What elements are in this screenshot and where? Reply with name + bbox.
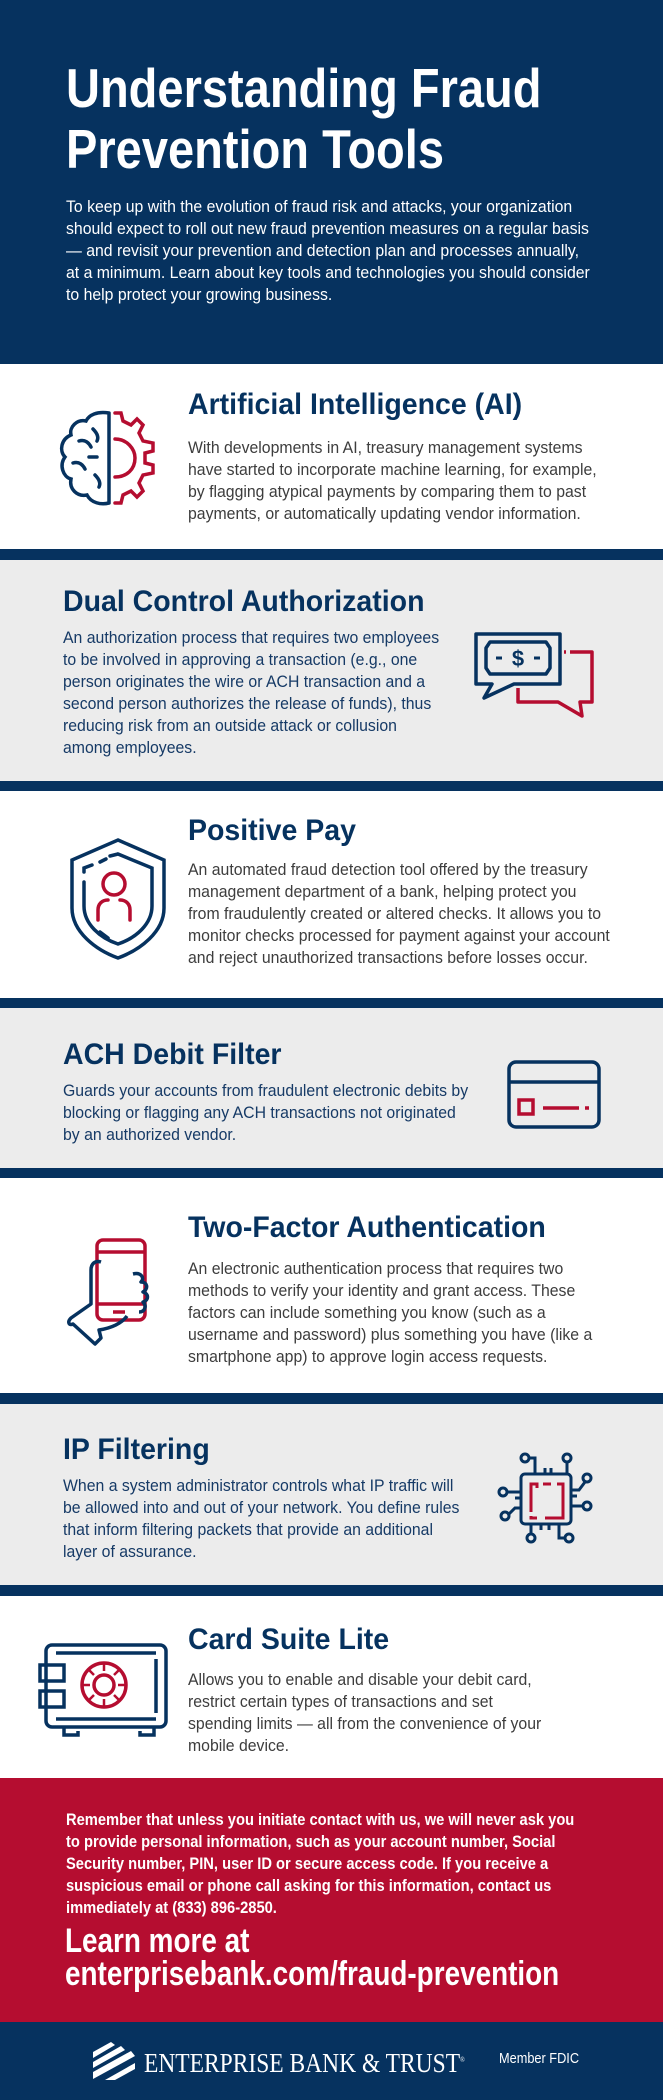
body: IP filtering: layer of assurance.: [63, 1542, 197, 1561]
body: card suite lite: spending limits — all from the convenience of your: [188, 1714, 541, 1733]
body: AI: by flagging atypical payments by comparing them to past: [188, 482, 586, 501]
body: two-factor: An electronic authentication process that requires two: [188, 1259, 563, 1278]
body: two-factor: [188, 1259, 592, 1366]
intro text: [66, 197, 590, 304]
body: ACH: blocking or flagging any ACH transactions not originated: [63, 1103, 456, 1122]
intro text: to help protect your growing business.: [66, 285, 332, 304]
body: two-factor: methods to verify your identity and grant access. These: [188, 1281, 575, 1300]
body: dual control: among employees.: [63, 738, 197, 757]
body: two-factor: smartphone app) to approve login access requests.: [188, 1347, 547, 1366]
intro text: should expect to roll out new fraud prevention measures on a regular basis: [66, 219, 589, 238]
body: ACH: by an authorized vendor.: [63, 1125, 236, 1144]
title: Prevention Tools: [66, 118, 444, 180]
body: dual control: to be involved in approving a transaction (e.g., one: [63, 650, 417, 669]
body: IP filtering: [63, 1476, 459, 1561]
intro text: To keep up with the evolution of fraud risk and attacks, your organization: [66, 197, 572, 216]
member FDIC: Member FDIC: [499, 2050, 579, 2067]
body: ACH: Guards your accounts from fraudulent electronic debits by: [63, 1081, 468, 1100]
body: positive pay: and reject unauthorized transactions before losses occur.: [188, 948, 588, 967]
panel: artificial intelligence: [60, 388, 597, 523]
intro text: at a minimum. Learn about key tools and technologies you should consider: [66, 263, 590, 282]
body: dual control: person originates the wire or ACH transaction and a: [63, 672, 425, 691]
learn more link text: enterprisebank.com/fraud-prevention: [65, 1955, 559, 1993]
body: positive pay: An automated fraud detection tool offered by the treasury: [188, 860, 588, 879]
icon: money chat bubbles: [474, 632, 594, 718]
icon: shield person: [70, 838, 166, 960]
callout text: Security number, PIN, user ID or secure access code. If you receive a: [66, 1854, 548, 1873]
intro text: — and revisit your prevention and detection plan and processes annually,: [66, 241, 579, 260]
callout text: Remember that unless you initiate contact with us, we will never ask you: [66, 1810, 574, 1829]
title: [66, 57, 541, 180]
panel: ACH debit filter: [0, 1008, 663, 1168]
learn more link text: Learn more at: [65, 1922, 249, 1960]
body: IP filtering: When a system administrator controls what IP traffic will: [63, 1476, 453, 1495]
panel: IP filtering: [0, 1404, 663, 1585]
callout text: to provide personal information, such as your account number, Social: [66, 1832, 555, 1851]
heading: ACH: ACH Debit Filter: [63, 1038, 282, 1071]
icon: logo stripes: [93, 2042, 135, 2080]
icon: money chat bubbles: $: [512, 646, 524, 671]
body: positive pay: [188, 860, 610, 967]
icon: safe: [38, 1643, 168, 1737]
panel: two-factor: [67, 1211, 592, 1366]
icon: chip: [498, 1452, 592, 1544]
heading: AI: Artificial Intelligence (AI): [188, 388, 522, 421]
body: AI: payments, or automatically updating vendor information.: [188, 504, 581, 523]
heading: two-factor: Two-Factor Authentication: [188, 1211, 546, 1244]
body: positive pay: management department of a bank, helping protect you: [188, 882, 576, 901]
body: dual control: An authorization process that requires two employees: [63, 628, 439, 647]
callout text: [66, 1810, 574, 1917]
body: positive pay: from fraudulently created or altered checks. It allows you to: [188, 904, 601, 923]
panel: card suite lite: [38, 1623, 541, 1755]
learn more link text: [65, 1922, 559, 1993]
body: two-factor: username and password) plus something you have (like a: [188, 1325, 592, 1344]
icon: phone in hand: [67, 1238, 150, 1346]
body: AI: With developments in AI, treasury management systems: [188, 438, 583, 457]
icon: brain gear: [60, 410, 155, 506]
panel: red callout: [0, 1778, 663, 2022]
icon: card: [507, 1060, 601, 1129]
logo: [93, 2042, 465, 2080]
callout text: suspicious email or phone call asking for this information, contact us: [66, 1876, 551, 1895]
heading: card suite lite: Card Suite Lite: [188, 1623, 389, 1656]
body: dual control: reducing risk from an outside attack or collusion: [63, 716, 397, 735]
footer: [0, 2022, 663, 2100]
panel: dual control: [0, 560, 663, 781]
body: IP filtering: that inform filtering packets that provide an additional: [63, 1520, 433, 1539]
body: AI: [188, 438, 597, 523]
body: IP filtering: be allowed into and out of your network. You define rules: [63, 1498, 459, 1517]
body: card suite lite: Allows you to enable and disable your debit card,: [188, 1670, 532, 1689]
body: positive pay: monitor checks processed for payment against your account: [188, 926, 610, 945]
panel: positive pay: [70, 814, 610, 967]
body: ACH: [63, 1081, 468, 1144]
body: card suite lite: restrict certain types of transactions and set: [188, 1692, 493, 1711]
body: card suite lite: [188, 1670, 541, 1755]
body: card suite lite: mobile device.: [188, 1736, 289, 1755]
body: dual control: second person authorizes the release of funds), thus: [63, 694, 431, 713]
heading: IP filtering: IP Filtering: [63, 1433, 210, 1466]
callout text: immediately at (833) 896-2850.: [66, 1898, 277, 1917]
header panel: [0, 0, 663, 364]
heading: dual control: Dual Control Authorization: [63, 585, 424, 618]
heading: positive pay: Positive Pay: [188, 814, 356, 847]
title: Understanding Fraud: [66, 57, 541, 119]
logo text: ENTERPRISE BANK & TRUST®: [144, 2048, 465, 2078]
body: dual control: [63, 628, 439, 757]
body: two-factor: factors can include something you know (such as a: [188, 1303, 546, 1322]
body: AI: have started to incorporate machine learning, for example,: [188, 460, 597, 479]
